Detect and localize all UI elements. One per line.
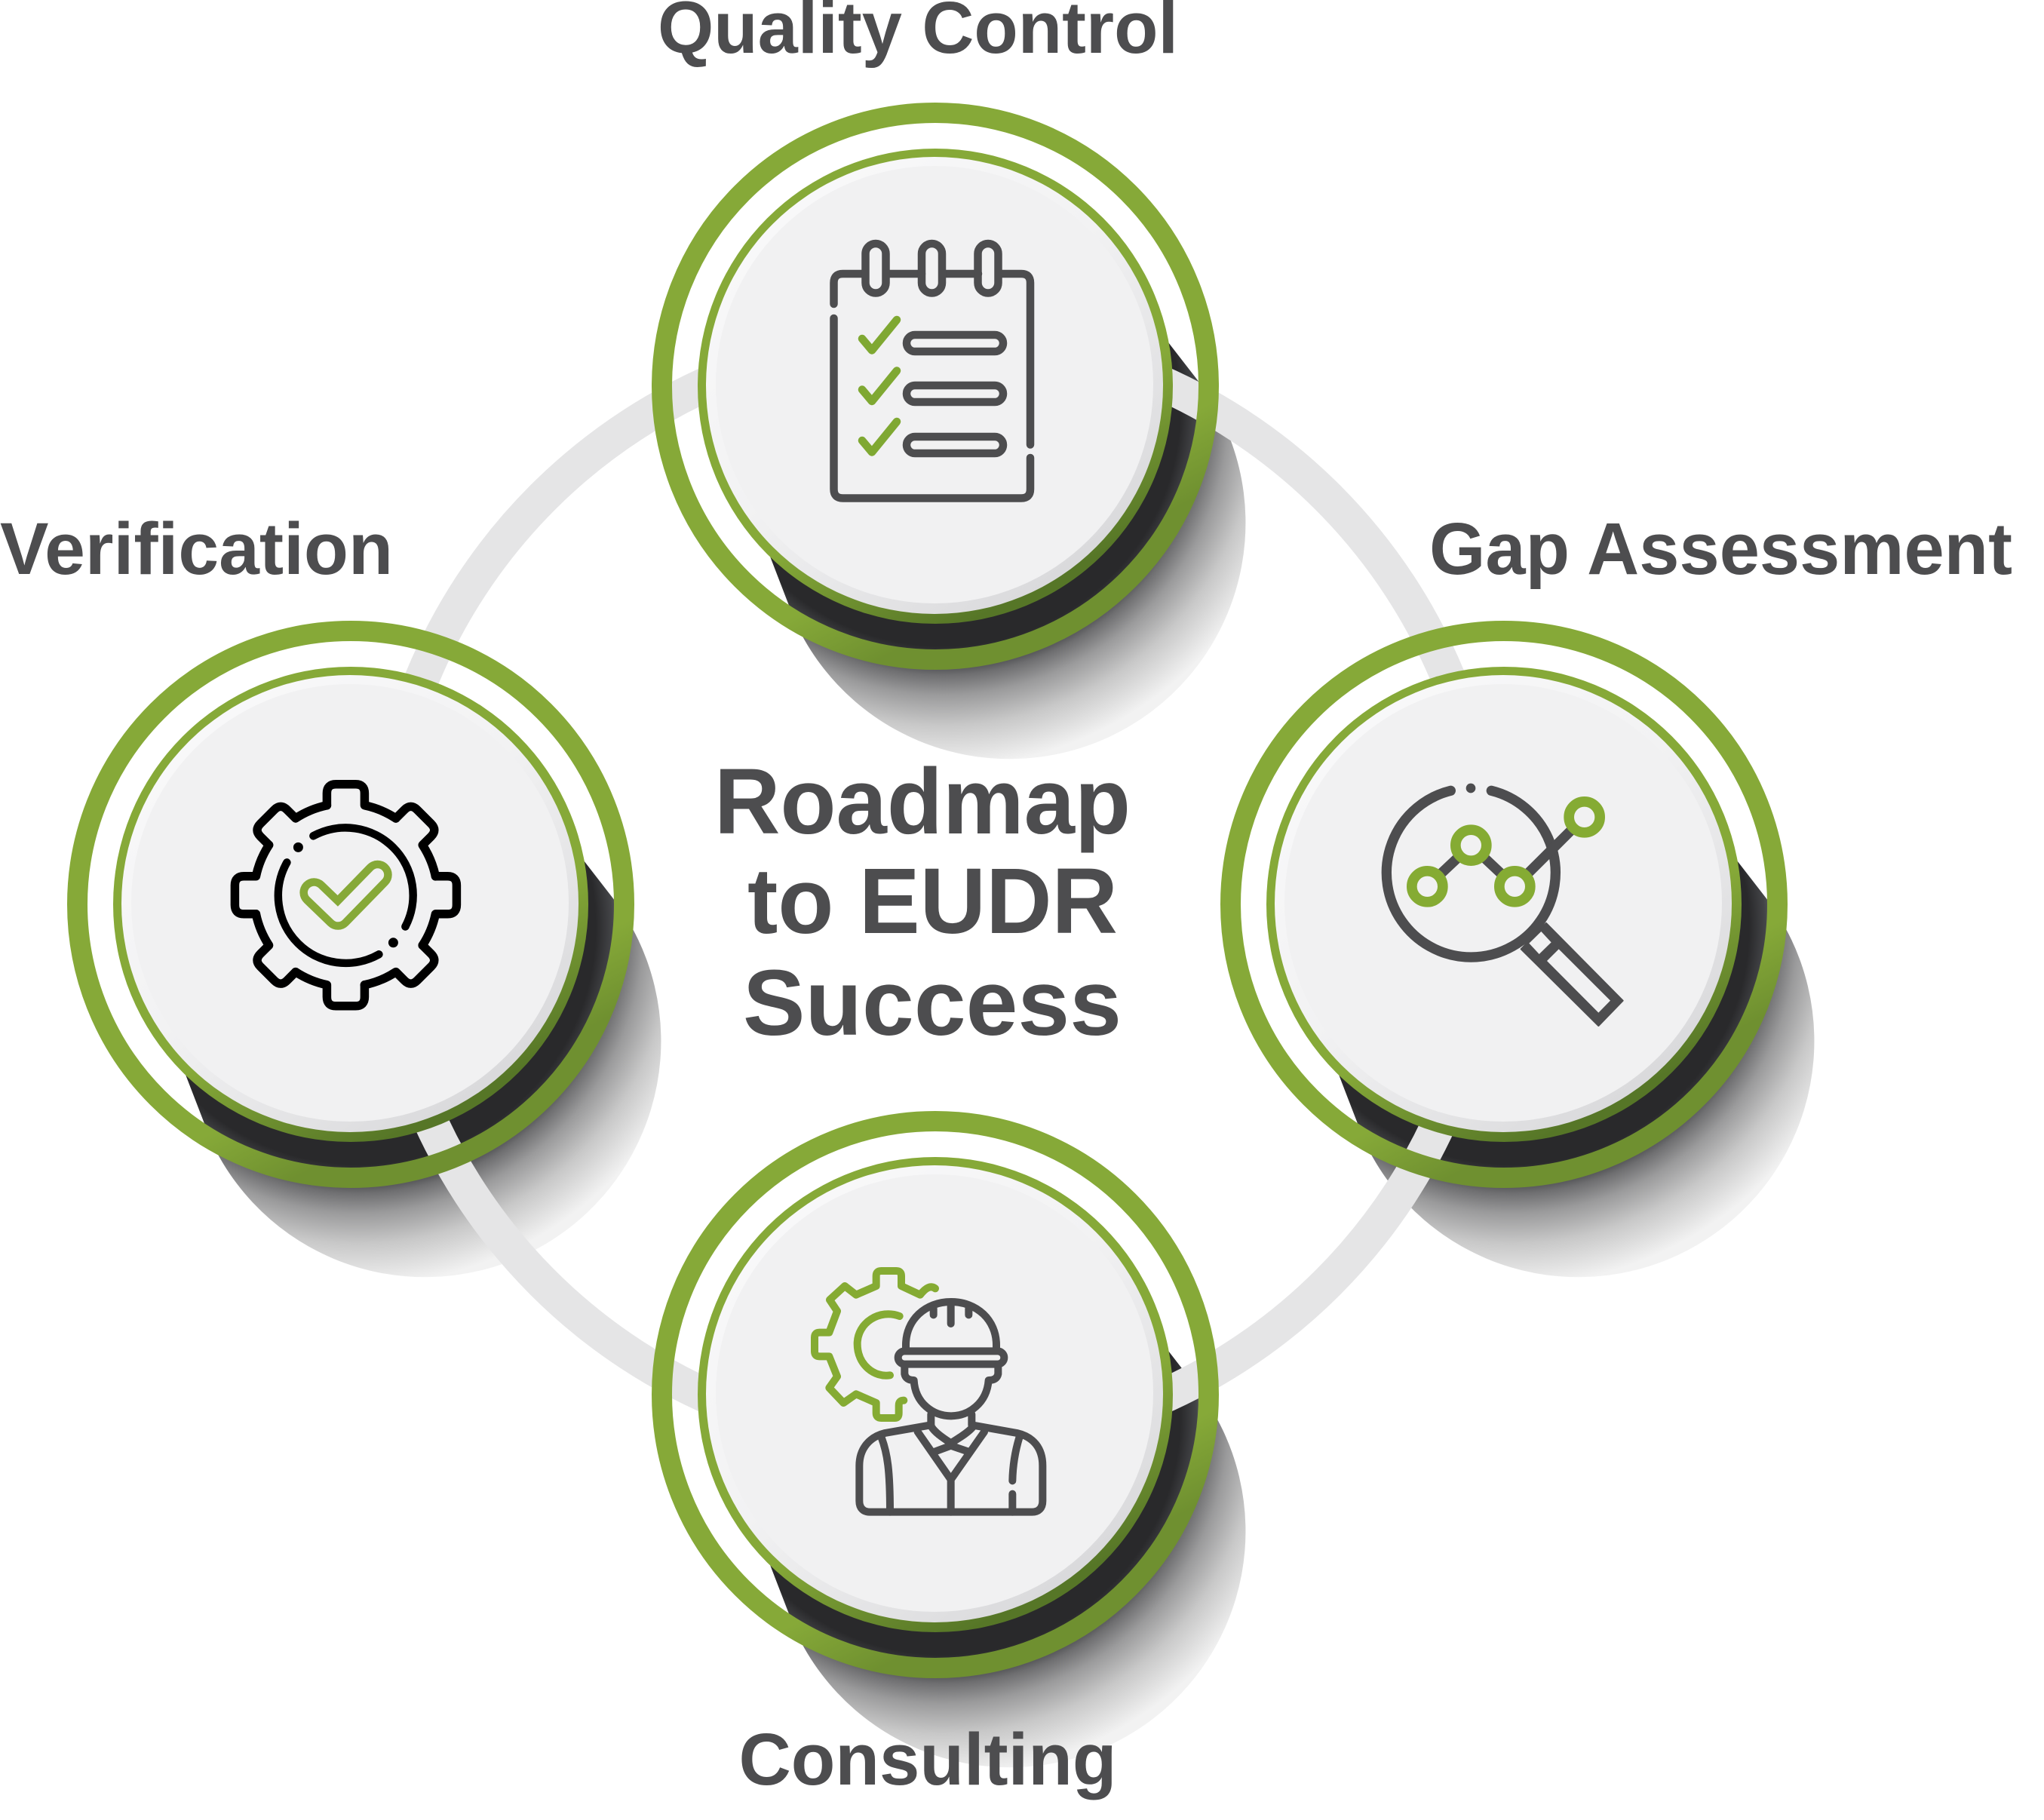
node: consulting disc [662,1121,1208,1668]
title: roadmap to EUDR success: Success [743,952,1122,1055]
label: consulting: Consulting [739,1718,1116,1800]
connecting grey ring [380,335,1490,1445]
shadow: verification [183,861,661,1277]
icon: engineer with hard hat and gear [815,1271,1042,1512]
node: gap assessment disc [1231,631,1777,1178]
label: verification: Verification [0,508,393,590]
node: verification disc [77,631,625,1178]
title: roadmap to EUDR success [714,750,1131,1055]
title: roadmap to EUDR success: to EUDR [747,850,1118,953]
shadow: gap assessment [1337,861,1814,1277]
shadow: quality control [768,342,1245,759]
node: quality control disc [662,113,1208,659]
title: roadmap to EUDR success: Roadmap [714,750,1131,854]
shadow: consulting [768,1351,1245,1767]
icon: gear with check mark [232,781,459,1009]
label: gap assessment: Gap Assessment [1429,508,2012,590]
icon: magnifier over line chart [1386,784,1623,1026]
icon: checklist notepad [834,244,1030,498]
